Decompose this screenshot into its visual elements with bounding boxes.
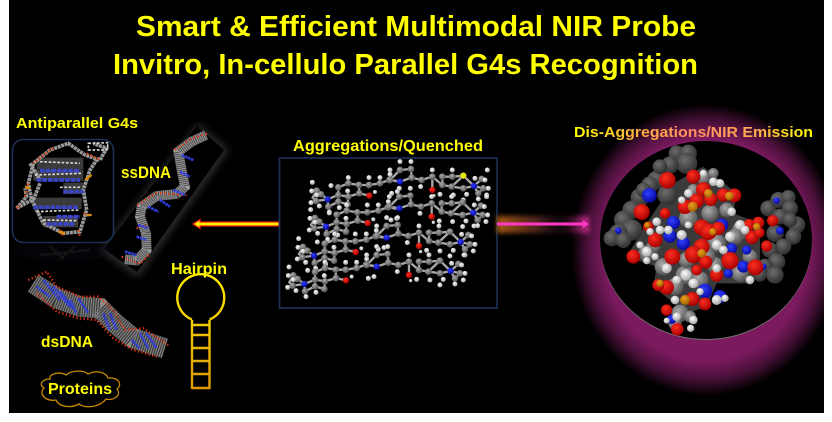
arrow: left to nucleic acids	[193, 220, 279, 228]
label: Antiparallel G4s: Antiparallel G4s	[16, 115, 138, 132]
label: Dis-Aggregations/NIR Emission: Dis-Aggregations/NIR Emission	[574, 124, 813, 141]
panel: hairpin	[171, 261, 227, 389]
panel: proteins	[41, 371, 120, 407]
ssDNA helix	[122, 133, 208, 264]
label: Aggregations/Quenched: Aggregations/Quenched	[293, 138, 483, 155]
space-filling molecule	[604, 145, 805, 336]
ssDNA strip	[104, 126, 224, 272]
protein cloud	[41, 371, 120, 407]
dsDNA helix	[28, 272, 168, 357]
magenta halo	[571, 104, 832, 396]
label: dsDNA: dsDNA	[41, 334, 93, 351]
G4 reflection	[14, 246, 112, 262]
clip margin	[824, 90, 832, 410]
ssDNA strip glow	[100, 123, 229, 278]
label: Hairpin: Hairpin	[171, 261, 227, 278]
label: ssDNA: ssDNA	[121, 163, 171, 182]
panel: dis-aggregation emission	[497, 90, 832, 410]
aggregate frame	[280, 158, 497, 308]
panel: dsDNA	[28, 272, 168, 357]
G4 frame	[12, 140, 114, 242]
panel: antiparallel G4s	[12, 115, 138, 262]
circle rim	[600, 142, 812, 340]
title	[113, 11, 698, 81]
panel: aggregations	[280, 138, 497, 308]
black circle	[600, 141, 812, 339]
dense core	[627, 167, 760, 313]
title: Invitro, In-cellulo Parallel G4s Recognition	[113, 49, 698, 81]
title: Smart & Efficient Multimodal NIR Probe	[136, 11, 696, 43]
label: Proteins: Proteins	[48, 381, 112, 398]
aggregate molecules	[285, 159, 491, 299]
panel: ssDNA	[100, 123, 229, 278]
G4 molecule	[17, 143, 108, 237]
arrow: right to emission	[497, 216, 589, 233]
hairpin shape	[177, 274, 224, 389]
